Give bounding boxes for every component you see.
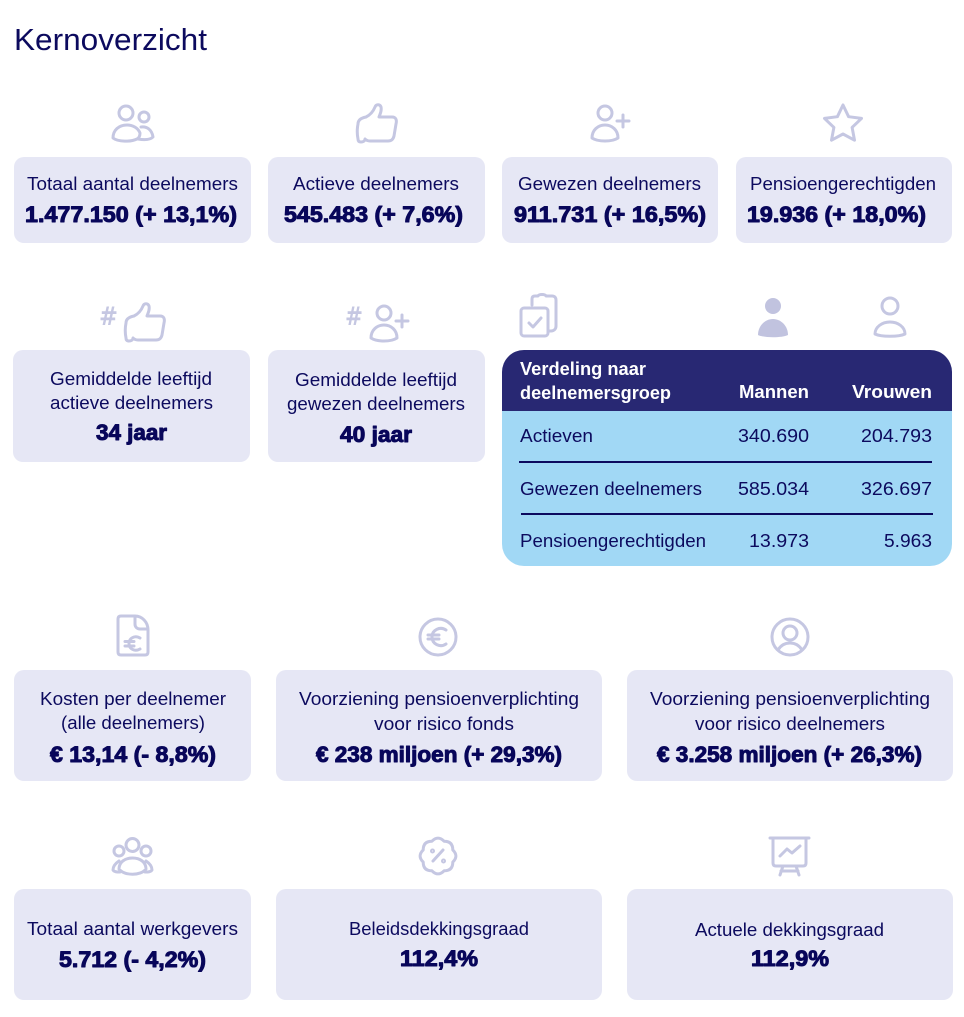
value: € 3.258 miljoen (+ 26,3%) <box>657 742 922 767</box>
value: 911.731 (+ 16,5%) <box>514 202 706 227</box>
row: actieven: 204.793 <box>861 426 932 446</box>
label line 2: (alle deelnemers) <box>61 713 205 733</box>
label: Voorziening pensioenverplichting <box>650 689 930 709</box>
table header: Verdeling naar <box>520 359 646 379</box>
value: 40 jaar <box>340 422 412 447</box>
panel: gemiddelde leeftijd gewezen deelnemers <box>268 350 485 462</box>
label: Voorziening pensioenverplichting <box>299 689 579 709</box>
label: Kosten per deelnemer <box>40 689 226 709</box>
label: Beleidsdekkingsgraad <box>349 919 529 939</box>
title: Kernoverzicht <box>14 22 207 57</box>
row: gewezen deelnemers: Gewezen deelnemers <box>520 479 702 499</box>
panel: voorziening risico fonds <box>276 670 602 781</box>
icon: euro coin <box>420 619 456 655</box>
label: Gemiddelde leeftijd <box>295 370 457 390</box>
row: gewezen deelnemers: 326.697 <box>861 479 932 499</box>
value: 112,9% <box>751 946 829 971</box>
row: gewezen deelnemers <box>520 479 932 499</box>
value: 34 jaar <box>96 420 167 445</box>
icon: clipboards <box>521 294 556 336</box>
value: € 238 miljoen (+ 29,3%) <box>316 742 562 767</box>
value: 112,4% <box>400 946 478 971</box>
table header: Mannen <box>739 382 809 402</box>
label line 2: voor risico fonds <box>374 714 514 734</box>
label: Actuele dekkingsgraad <box>695 920 884 940</box>
row: pensioengerechtigden: 5.963 <box>884 531 932 551</box>
icon: presentation board <box>770 838 809 875</box>
panel: actuele dekkingsgraad <box>627 889 953 1000</box>
icon: user circle <box>772 619 808 655</box>
label: Pensioengerechtigden <box>750 174 936 194</box>
panel: actieve deelnemers <box>268 157 485 243</box>
icon: hash person plus <box>345 302 408 341</box>
label line 2: actieve deelnemers <box>50 393 213 413</box>
label: Gewezen deelnemers <box>518 174 701 194</box>
panel: pensioengerechtigden <box>736 157 952 243</box>
panel: voorziening risico deelnemers <box>627 670 953 781</box>
label line 2: gewezen deelnemers <box>287 394 465 414</box>
icon: person plus <box>592 106 629 141</box>
table header: deelnemersgroep <box>520 383 671 403</box>
icon: thumbs up <box>357 105 396 142</box>
row: actieven <box>520 426 932 446</box>
panel: gemiddelde leeftijd actieve deelnemers <box>13 350 250 462</box>
table: verdeling naar deelnemersgroep <box>502 350 952 566</box>
row: actieven: Actieven <box>520 426 593 446</box>
panel: kosten per deelnemer <box>14 670 251 781</box>
icon: hash person plus: # <box>345 302 363 332</box>
row: pensioengerechtigden: 13.973 <box>749 531 809 551</box>
icon: group of people <box>113 838 152 874</box>
row: actieven: 340.690 <box>738 426 809 446</box>
panel: gewezen deelnemers <box>502 157 718 243</box>
icon: euro document <box>118 616 148 655</box>
table header: Vrouwen <box>852 382 932 402</box>
icon: woman <box>875 298 905 336</box>
icon: hash thumbs up <box>99 302 164 341</box>
panel: totaal aantal deelnemers <box>14 157 251 243</box>
value: 5.712 (- 4,2%) <box>59 947 206 972</box>
icon: man <box>758 298 788 337</box>
value: 545.483 (+ 7,6%) <box>284 202 463 227</box>
row: pensioengerechtigden <box>520 531 932 551</box>
value: 1.477.150 (+ 13,1%) <box>25 202 237 227</box>
value: 19.936 (+ 18,0%) <box>747 202 926 227</box>
label line 2: voor risico deelnemers <box>695 714 885 734</box>
value: € 13,14 (- 8,8%) <box>50 742 216 767</box>
label: Totaal aantal deelnemers <box>27 174 238 194</box>
icon: people <box>113 106 153 141</box>
label: Gemiddelde leeftijd <box>50 369 212 389</box>
icon: percent badge <box>420 838 456 874</box>
label: Totaal aantal werkgevers <box>27 919 238 939</box>
row: pensioengerechtigden: Pensioengerechtigden <box>520 531 706 551</box>
panel: totaal aantal werkgevers <box>14 889 251 1000</box>
icon: hash thumbs up: # <box>99 302 118 332</box>
label: Actieve deelnemers <box>293 174 459 194</box>
panel: beleidsdekkingsgraad <box>276 889 602 1000</box>
row: gewezen deelnemers: 585.034 <box>738 479 809 499</box>
icon: star <box>824 105 862 140</box>
table header <box>520 359 932 403</box>
